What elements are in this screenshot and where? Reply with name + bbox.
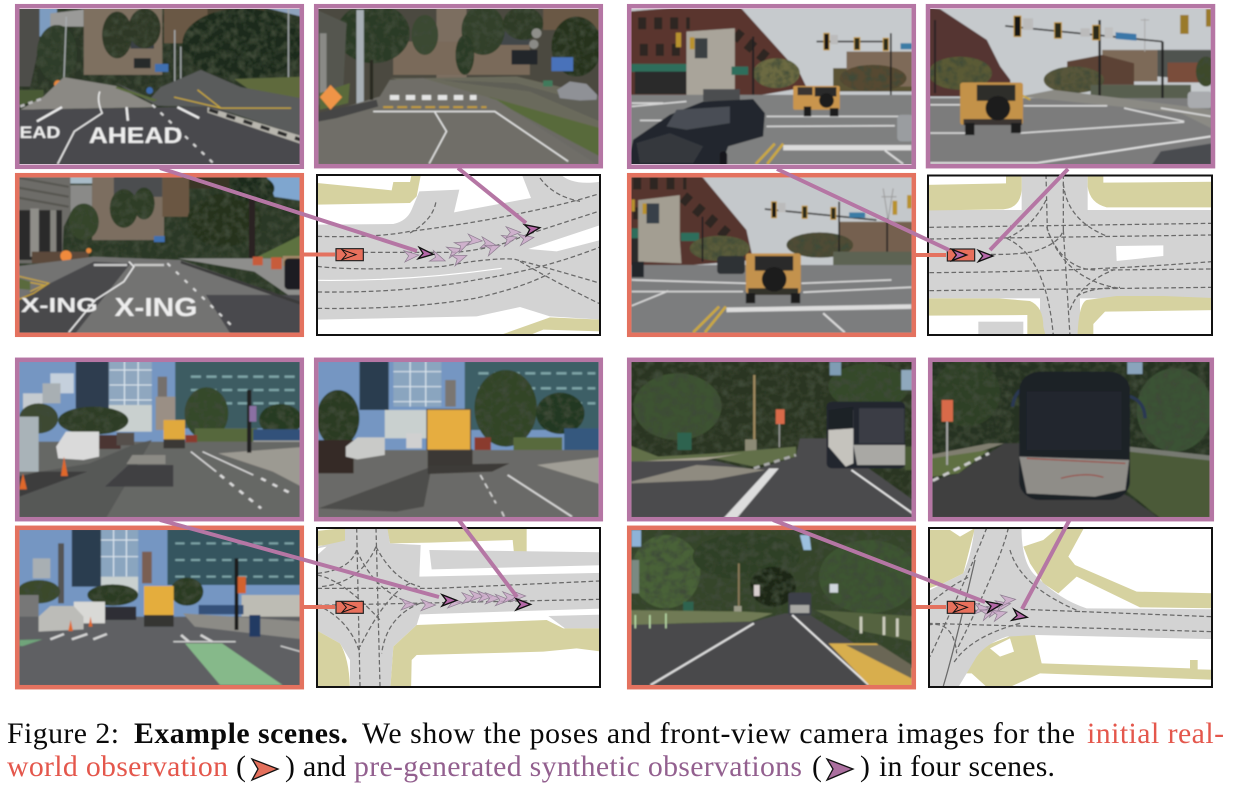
photo: synthetic view jeep ahead left xyxy=(920,0,1221,175)
caption line 2: ) xyxy=(860,750,870,783)
connector: synthetic view 1 to pose xyxy=(160,520,439,597)
photo: initial real-world X-ING road xyxy=(10,170,311,343)
photo: synthetic view crosswalk xyxy=(310,0,610,173)
connector: real-world panel to ego pose xyxy=(916,605,946,609)
connector: real-world panel to ego pose xyxy=(916,253,946,257)
caption xyxy=(7,717,1224,783)
photo: initial real-world jeep xyxy=(623,170,923,343)
caption line 2: in four scenes. xyxy=(879,750,1055,783)
connector: synthetic view 2 to pose xyxy=(458,519,517,597)
connector: synthetic view 1 to pose xyxy=(777,169,949,250)
photo: synthetic view bus on right xyxy=(620,353,922,527)
caption line 1: Figure 2: xyxy=(7,717,119,750)
connector: real-world panel to ego pose xyxy=(304,605,335,609)
connector: real-world panel to ego pose xyxy=(304,252,335,256)
caption line 2: and xyxy=(303,750,346,783)
caption line 1: We show the poses and front-view camera images for the xyxy=(362,717,1075,750)
photo: synthetic view bus close-up xyxy=(921,353,1220,527)
photo: synthetic view AHEAD road xyxy=(10,0,311,173)
photo: initial real-world X-ING road: X-ING xyxy=(21,295,98,317)
connector: synthetic view 1 to pose xyxy=(773,520,985,602)
photo: initial real-world bus in distance xyxy=(620,520,922,693)
photo: synthetic view with black car xyxy=(623,0,923,173)
map: curved junction lane graph with poses xyxy=(920,520,1220,693)
connector: synthetic view 2 to pose xyxy=(1022,519,1070,609)
caption line 2: ( xyxy=(812,750,822,783)
caption line 1: initial real- xyxy=(1087,717,1224,750)
caption line 2 xyxy=(7,750,1055,783)
photo: synthetic view distant truck xyxy=(7,353,312,527)
scene 3: yellow truck, city towers xyxy=(7,353,613,693)
scene 4: bus on tree-lined road xyxy=(620,353,1220,693)
caption line 2: ( xyxy=(236,750,246,783)
connector: synthetic view 2 to pose xyxy=(458,168,526,223)
connector: synthetic view 2 to pose xyxy=(990,169,1068,250)
photo: initial real-world bike lane xyxy=(7,520,312,693)
connector: synthetic view 1 to pose xyxy=(160,168,417,251)
caption line 2: pre-generated synthetic observations xyxy=(354,750,802,783)
photo: synthetic view AHEAD road: AHEAD xyxy=(89,122,182,148)
photo: synthetic view close truck xyxy=(307,353,613,527)
caption line 2: ) xyxy=(285,750,295,783)
icon: initial real-world pose arrow xyxy=(252,759,278,780)
map: four-way junction lane graph with poses xyxy=(310,520,610,693)
icon: synthetic pose arrow xyxy=(827,759,853,780)
scene 2: jeep at intersection xyxy=(623,0,1221,343)
caption line 1: Example scenes. xyxy=(134,717,348,750)
caption line 2: world observation xyxy=(7,750,228,783)
photo: initial real-world X-ING road: X-ING xyxy=(115,292,197,322)
scene 1: road markings AHEAD / X-ING xyxy=(10,0,610,343)
photo: synthetic view AHEAD road: EAD xyxy=(19,123,60,142)
caption line 1 xyxy=(7,717,1224,750)
map: lane graph with poses xyxy=(310,170,610,343)
map: intersection lane graph with poses xyxy=(920,170,1220,343)
